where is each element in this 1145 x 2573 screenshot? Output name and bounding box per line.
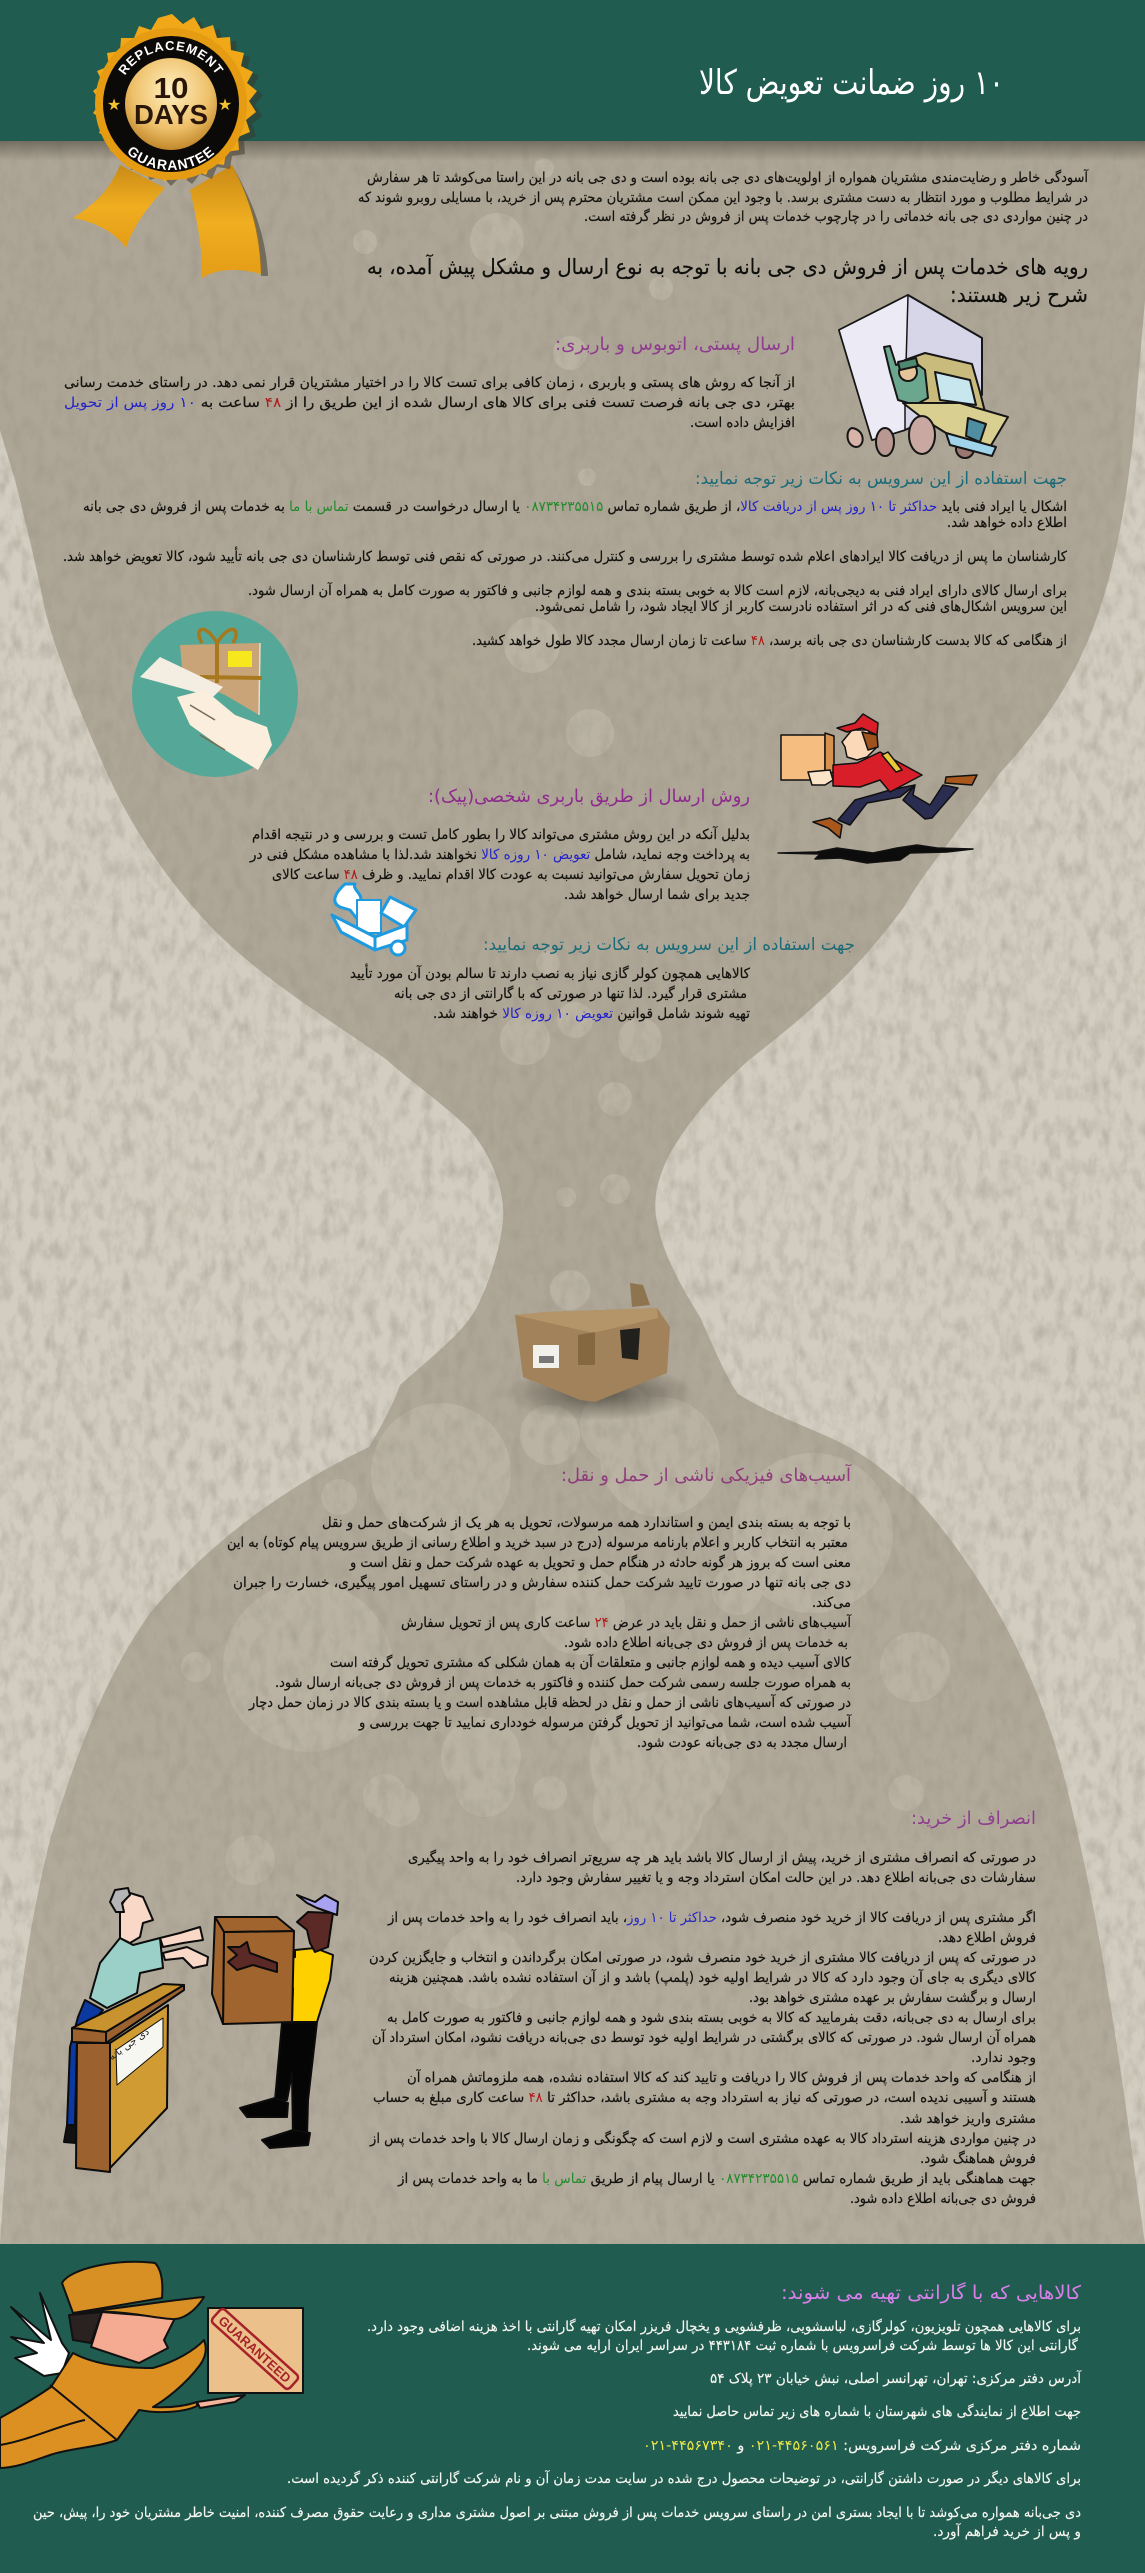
illustration: handing over a parcel at the counter — [64, 1888, 338, 2172]
text: purchase cancellation: فروش دی جی‌بانه اطلاع داده شود. — [850, 2191, 1036, 2207]
section: service notes — [63, 469, 1067, 649]
ribbons — [73, 165, 268, 279]
courier — [212, 1895, 338, 2148]
section: installation goods — [350, 935, 855, 1022]
text: guarantee and contacts: برای کالاهایی همچون تلویزیون، کولرگازی، لباسشویی، ظرفشویی و یخچال فریزر امکان تهیه گارانتی با اخذ هزینه اضافی وجود دارد. — [367, 2318, 1081, 2335]
text: guarantee and contacts — [33, 2318, 1082, 2540]
text: personal courier: به پرداخت وجه نماید، شامل تعویض ۱۰ روزه کالا نخواهند شد.لذا با مشاهده مشکل فنی در — [249, 847, 750, 863]
text: purchase cancellation: همراه آن ارسال شود. در صورتی که کالای برگشتی در شرایط اولیه خود توسط دی جی‌بانه دریافت نشود، امکان استرداد آن — [372, 2029, 1036, 2046]
text: purchase cancellation: ارسال و برگشت سفارش بر عهده مشتری خواهد بود. — [749, 1989, 1036, 2006]
badge lettering: ★ — [218, 95, 232, 114]
main heading: شرح زیر هستند: — [950, 283, 1088, 307]
heading: service notes: جهت استفاده از این سرویس به نکات زیر توجه نمایید: — [695, 469, 1067, 489]
text: installation goods — [350, 963, 750, 1022]
text: guarantee and contacts: آدرس دفتر مرکزی: تهران، تهرانسر اصلی، نبش خیابان ۲۳ پلاک ۵۴ — [710, 2370, 1082, 2387]
text: guarantee and contacts: برای کالاهای دیگر در صورت داشتن گارانتی، در توضیحات محصول درج شده در سایت مدت زمان آن و نام شرکت گارانتی کننده ذکر گردیده است. — [287, 2470, 1081, 2487]
badge lettering — [107, 41, 232, 170]
footer band — [0, 2244, 1145, 2573]
text: purchase cancellation: در چنین مواردی هزینه استرداد کالا به عهده مشتری است و لازم است که چگونگی و زمان ارسال کالا با واحد خدمات پس از — [369, 2130, 1036, 2147]
intro paragraph: در شرایط مطلوب و مورد انتظار به دست مشتری برسد. با وجود این ممکن است مشتریان محترم پس از خرید، با مسایلی روبرو شوند که — [358, 190, 1088, 206]
text: guarantee and contacts: دی جی‌بانه همواره می‌کوشد تا با ایجاد بستری امن در راستای سرویس خدمات پس از فروش مبتنی بر اصول مشتری مداری و رعایت حقوق مصرف کننده، امنیت خاطر مشتریان خود را، پیش، حین — [33, 2505, 1081, 2521]
badge lettering: ★ — [107, 95, 121, 114]
main heading — [367, 254, 1088, 307]
text: transport damage: معتبر به انتخاب کاربر و اعلام بارنامه مرسوله (درج در سبد خرید و اطلاع رسانی از طریق سرویس پیام کوتاه) به این — [227, 1535, 848, 1551]
text: post and freight — [64, 374, 795, 431]
seal — [93, 14, 263, 186]
section: post and freight — [64, 334, 795, 431]
text: purchase cancellation: برای ارسال به دی جی‌بانه، دقت بفرمایید که کالا به خوبی بسته بندی شود و همه لوازم جانبی و فاکتور به صورت کامل به — [387, 2010, 1036, 2026]
icon: gift parcel in hand — [132, 611, 298, 777]
text: transport damage: در صورتی که آسیب‌های ناشی از حمل و نقل در لحظه قابل مشاهده است و یا بسته بندی کالا در زمان حمل دچار — [248, 1694, 851, 1711]
text: transport damage: معنی است که بروز هر گونه حادثه در هنگام حمل و تحویل به عهده شرکت حمل و نقل است و — [349, 1554, 851, 1571]
badge: 10 days replacement guarantee — [73, 14, 268, 279]
text: purchase cancellation: فروش هماهنگ شود. — [920, 2150, 1036, 2167]
icon: delivery truck — [839, 295, 1008, 458]
text: personal courier — [249, 826, 750, 903]
header band — [0, 0, 1145, 161]
crack shadow — [778, 845, 973, 863]
section: transport damage — [227, 1463, 852, 1751]
illustration: winged courier with guaranteed box: GUARANTEED — [215, 2313, 294, 2386]
wings — [11, 2293, 69, 2376]
text: transport damage: دی جی بانه تنها در صورت تایید شرکت حمل کننده سفارش و در راستای تسهیل امور پیگیری، خسارت را جبران — [233, 1574, 851, 1591]
text: service notes: از هنگامی که کالا بدست کارشناسان دی جی بانه برسد، ۴۸ ساعت تا زمان ارسال مجدد کالا طول خواهد کشید. — [472, 632, 1067, 649]
text: transport damage: با توجه به بسته بندی ایمن و استاندارد همه مرسولات، تحویل به هر یک از شرکت‌های حمل و نقل — [322, 1515, 851, 1531]
text: purchase cancellation: هستند و آسیبی ندیده است، در صورتی که نیاز به استرداد وجه به مشتری باشد، حداکثر تا ۴۸ ساعت کاری مبلغ به حساب — [373, 2089, 1036, 2106]
text: purchase cancellation: از هنگامی که واحد خدمات پس از فروش کالا را دریافت و تایید کند که کالا استفاده نشده، همه ملزوماتش همراه آن — [407, 2069, 1036, 2086]
parcel — [208, 2308, 303, 2393]
title: ۱۰ روز ضمانت تعویض کالا — [699, 63, 1004, 103]
text: personal courier: زمان تحویل سفارش می‌توانید نسبت به عودت کالا اقدام نمایید. و ظرف ۴۸ ساعت کالای — [272, 867, 750, 883]
image: damaged cardboard box — [505, 1283, 695, 1421]
icon: blue toolbox — [332, 884, 416, 955]
badge lettering: GUARANTEE — [128, 146, 214, 170]
text: purchase cancellation: فروش اطلاع دهد. — [938, 1930, 1036, 1946]
text: purchase cancellation: جهت هماهنگی باید از طریق شماره تماس ۰۸۷۳۴۲۳۵۵۱۵ یا ارسال پیام از طریق تماس با ما به واحد خدمات پس از — [397, 2170, 1036, 2187]
bokeh circles — [181, 158, 950, 2009]
text: guarantee and contacts: گارانتی این کالا ها توسط شرکت فراسرویس با شماره ثبت ۴۴۳۱۸۴ در سراسر ایران ارایه می شوند. — [527, 2337, 1078, 2354]
text: personal courier: بدلیل آنکه در این روش مشتری می‌تواند کالا را بطور کامل تست و بررسی و در نتیجه اقدام — [252, 826, 750, 843]
heading: personal courier: روش ارسال از طریق باربری شخصی(پیک): — [428, 786, 750, 807]
section: purchase cancellation — [369, 1808, 1036, 2207]
text: service notes: اشکال یا ایراد فنی باید حداکثر تا ۱۰ روز پس از دریافت کالا، از طریق شماره تماس ۰۸۷۳۴۲۳۵۵۱۵ یا ارسال درخواست در قسمت تماس با ما به خدمات پس از فروش دی جی بانه — [83, 499, 1067, 515]
text: guarantee and contacts: جهت اطلاع از نمایندگی های شهرستان با شماره های زیر تماس حاصل نمایید — [673, 2403, 1081, 2420]
customer — [64, 1888, 208, 2143]
text: service notes: اطلاع داده خواهد شد. — [947, 515, 1067, 531]
heading: installation goods: جهت استفاده از این سرویس به نکات زیر توجه نمایید: — [483, 935, 855, 955]
text: installation goods: تهیه شوند شامل قوانین تعویض ۱۰ روزه کالا خواهند شد. — [433, 1006, 750, 1022]
text: installation goods: مشتری قرار گیرد. لذا تنها در صورتی که با گارانتی از دی جی بانه — [394, 985, 747, 1002]
text: post and freight: از آنجا که روش های پستی و باربری ، زمان کافی برای تست کالا را در اختیار مشتریان قرار نمی دهد. در راستای خدمت رسانی — [64, 374, 795, 391]
text: transport damage: می‌کند. — [812, 1595, 851, 1611]
heading: transport damage: آسیب‌های فیزیکی ناشی از حمل و نقل: — [561, 1463, 852, 1486]
text: post and freight: افزایش داده است. — [690, 415, 795, 431]
text: purchase cancellation: مشتری واریز خواهد شد. — [900, 2111, 1036, 2127]
seal: DAYS — [134, 99, 208, 130]
seal: 10 — [154, 73, 188, 105]
icon: running courier with box — [778, 714, 977, 863]
text: post and freight: بهتر، دی جی بانه فرصت تست فنی برای کالا های ارسال شده از این طریق را از ۴۸ ساعت به ۱۰ روز پس از تحویل — [64, 395, 795, 411]
text: purchase cancellation: سفارشات دی جی‌بانه اطلاع دهد. در این حالت امکان استرداد وجه و یا تغییر سفارش وجود دارد. — [516, 1870, 1036, 1886]
text: transport damage: آسیب شده است، شما می‌توانید از تحویل گرفتن مرسوله خودداری نمایید تا جهت بررسی و — [358, 1714, 852, 1731]
intro paragraph — [358, 169, 1089, 225]
body — [0, 2340, 206, 2468]
text: service notes: برای ارسال کالای دارای ایراد فنی به دیجی‌بانه، لازم است کالا به خوبی بسته بندی و همه لوازم جانبی و فاکتور به صورت کامل به همراه آن ارسال شود. — [248, 582, 1067, 599]
text: transport damage: ارسال مجدد به دی جی‌بانه عودت شود. — [637, 1735, 847, 1751]
text: transport damage: به همراه صورت جلسه رسمی شرکت حمل کننده و فاکتور به خدمات پس از فروش دی جی‌بانه ارسال شود. — [275, 1675, 851, 1691]
text: purchase cancellation — [369, 1849, 1036, 2207]
footer text — [33, 2281, 1082, 2540]
heading: purchase cancellation: انصراف از خرید: — [911, 1808, 1036, 1829]
text: service notes: کارشناسان ما پس از دریافت کالا ایرادهای اعلام شده توسط مشتری را بررسی و کنترل می‌کنند. در صورتی که نقص فنی توسط کارشناسان دی جی بانه تأیید شود، کالا تعویض خواهد شد. — [63, 546, 1067, 565]
text: transport damage: آسیب‌های ناشی از حمل و نقل باید در عرض ۲۴ ساعت کاری پس از تحویل سفارش — [401, 1614, 852, 1631]
heading: guaranteed goods: کالاهایی که با گارانتی تهیه می شوند: — [781, 2281, 1082, 2304]
text: guarantee and contacts: و پس از خرید فراهم آورد. — [933, 2523, 1081, 2540]
face — [91, 2312, 175, 2363]
counter: دی جی بانه — [107, 2026, 152, 2063]
intro paragraph: در چنین مواردی دی جی بانه خدماتی را در چارچوب خدمات پس از فروش در نظر گرفته است. — [584, 208, 1088, 225]
text: transport damage: به خدمات پس از فروش دی جی‌بانه اطلاع داده شود. — [564, 1635, 848, 1651]
text: transport damage — [227, 1515, 852, 1751]
illustration: winged courier with guaranteed box — [0, 2262, 303, 2468]
heading: post and freight: ارسال پستی، اتوبوس و باربری: — [555, 334, 795, 355]
main heading: رویه های خدمات پس از فروش دی جی بانه با توجه به نوع ارسال و مشکل پیش آمده، به — [367, 254, 1088, 279]
counter — [72, 1984, 184, 2172]
text: purchase cancellation: کالای دیگری به جای آن وجود دارد که کالا در شرایط اولیه خود (پلمپ) باشد و از آن استفاده نشده باشد. همچنین هزینه — [389, 1969, 1036, 1986]
section: personal courier — [249, 786, 750, 903]
text: personal courier: جدید برای شما ارسال خواهد شد. — [564, 887, 750, 903]
text: service notes — [63, 499, 1067, 649]
text: purchase cancellation: در صورتی که انصراف مشتری از خرید، پیش از ارسال کالا باشد باید هر چه سریع‌تر انصراف خود را به واحد پیگیری — [408, 1849, 1036, 1866]
text: purchase cancellation: وجود ندارد. — [971, 2050, 1036, 2066]
text: purchase cancellation: اگر مشتری پس از دریافت کالا از خرید خود منصرف شود، حداکثر تا ۱۰ روز، باید انصراف خود را به واحد خدمات پس از — [387, 1909, 1036, 1926]
intro paragraph: آسودگی خاطر و رضایت‌مندی مشتریان همواره از اولویت‌های دی جی بانه بوده است و دی جی بانه در این راستا می‌کوشد تا هر سفارش — [367, 169, 1089, 186]
cap — [62, 2262, 162, 2313]
badge lettering: REPLACEMENT — [118, 41, 224, 75]
text: transport damage: کالای آسیب دیده و همه لوازم جانبی و متعلقات آن به همان شکلی که مشتری تحویل گرفته است — [330, 1654, 851, 1671]
text: purchase cancellation: در صورتی که پس از دریافت کالا مشتری از خرید خود منصرف شود، در صورتی امکان برگرداندن و انتخاب و جایگزین کردن — [369, 1949, 1036, 1966]
text: service notes: این سرویس اشکال‌های فنی که در اثر استفاده نادرست کاربر از کالا ایجاد شود، را شامل نمی‌شود. — [535, 599, 1067, 615]
text: installation goods: کالاهایی همچون کولر گازی نیاز به نصب دارند تا سالم بودن آن مورد تأیید — [350, 963, 750, 982]
text: guarantee and contacts: شماره دفتر مرکزی شرکت فراسرویس: ‪۰۲۱-۴۴۵۶۰۵۶۱‬ و ‪۰۲۱-۴۴۵۶۷۳۴۰‬ — [643, 2438, 1081, 2454]
